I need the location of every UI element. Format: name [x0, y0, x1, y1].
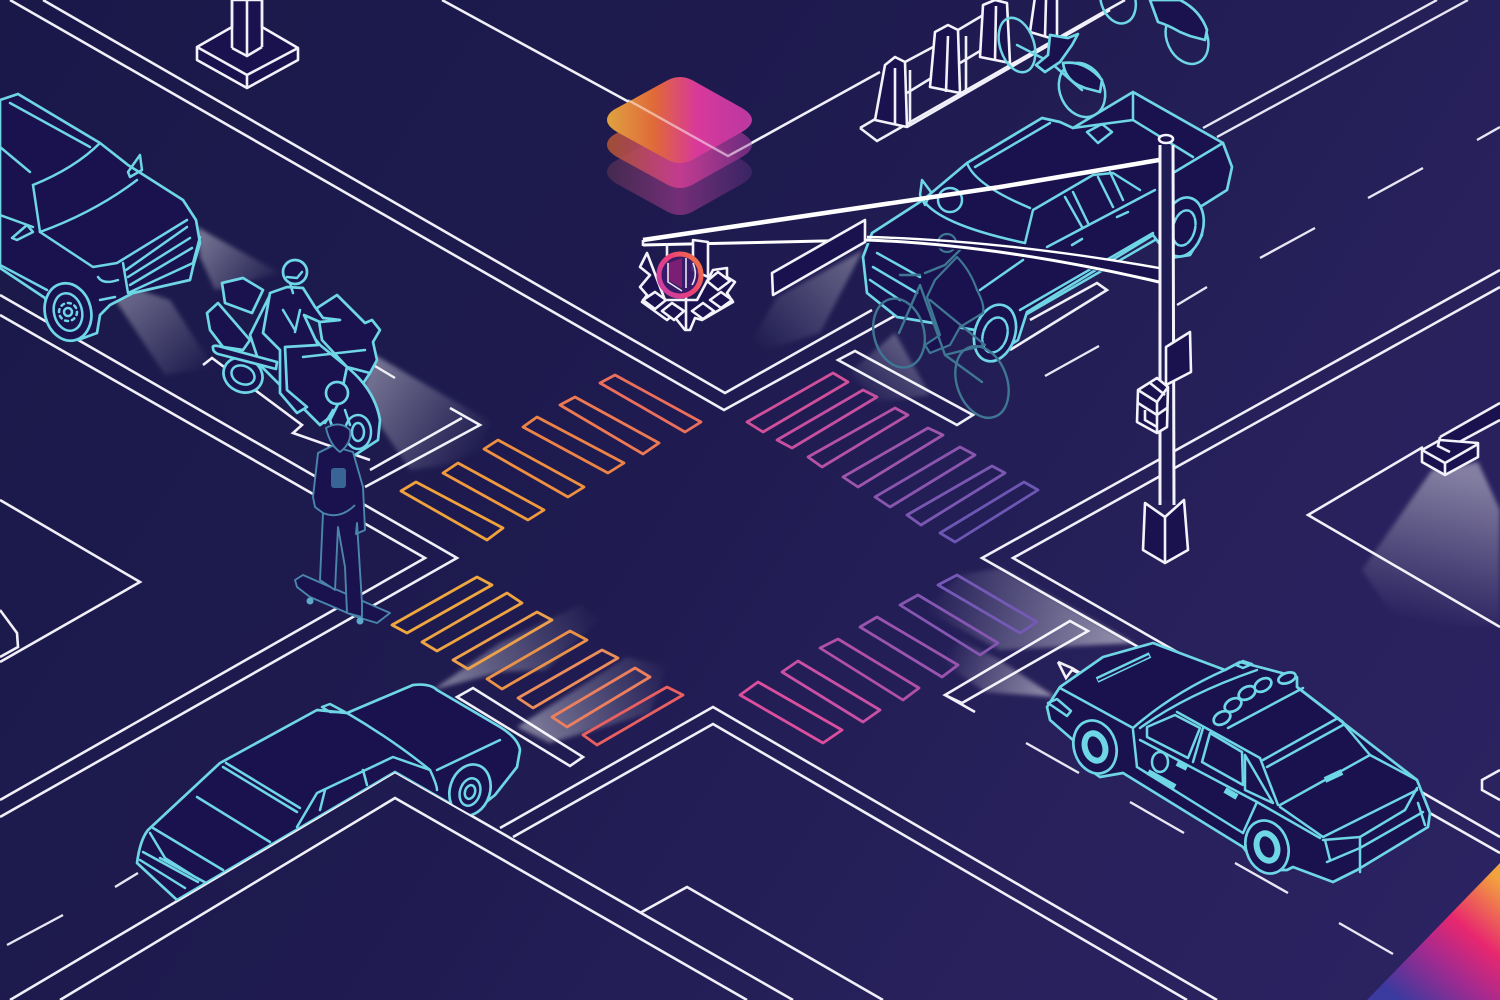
- vehicle: police car: [1047, 643, 1430, 882]
- crosswalk: south-east: [740, 575, 1037, 743]
- traffic signal pole and arm: [643, 135, 1174, 505]
- bike: front: [1094, 0, 1217, 71]
- stop lines and lane arrows: [203, 283, 1107, 766]
- cyclist: [866, 234, 1018, 425]
- street name sign: [772, 220, 865, 295]
- traffic light head: [640, 240, 735, 330]
- vehicle: SUV: [0, 94, 200, 346]
- vehicle: sedan: [137, 685, 520, 900]
- pole-mounted sign: [1166, 332, 1191, 385]
- icon: stacked layers: [607, 77, 752, 215]
- crosswalk: north-west: [401, 375, 701, 540]
- motorcycle rider: [207, 260, 380, 455]
- crosswalk: south-west: [392, 577, 683, 745]
- signal pole base: [1143, 500, 1188, 563]
- street light: [1422, 403, 1500, 475]
- corner gradient triangle: [1367, 863, 1500, 1000]
- pole-mounted control box: [1137, 378, 1168, 433]
- light beams: [100, 227, 1500, 743]
- vehicle: pickup truck: [863, 92, 1232, 367]
- bollards: [875, 0, 1057, 127]
- bike: rear: [992, 13, 1114, 125]
- crosswalk: north-east: [747, 373, 1038, 542]
- lamp post base: [197, 0, 298, 88]
- barrier rail: [860, 0, 1125, 141]
- skateboarder: [295, 424, 390, 624]
